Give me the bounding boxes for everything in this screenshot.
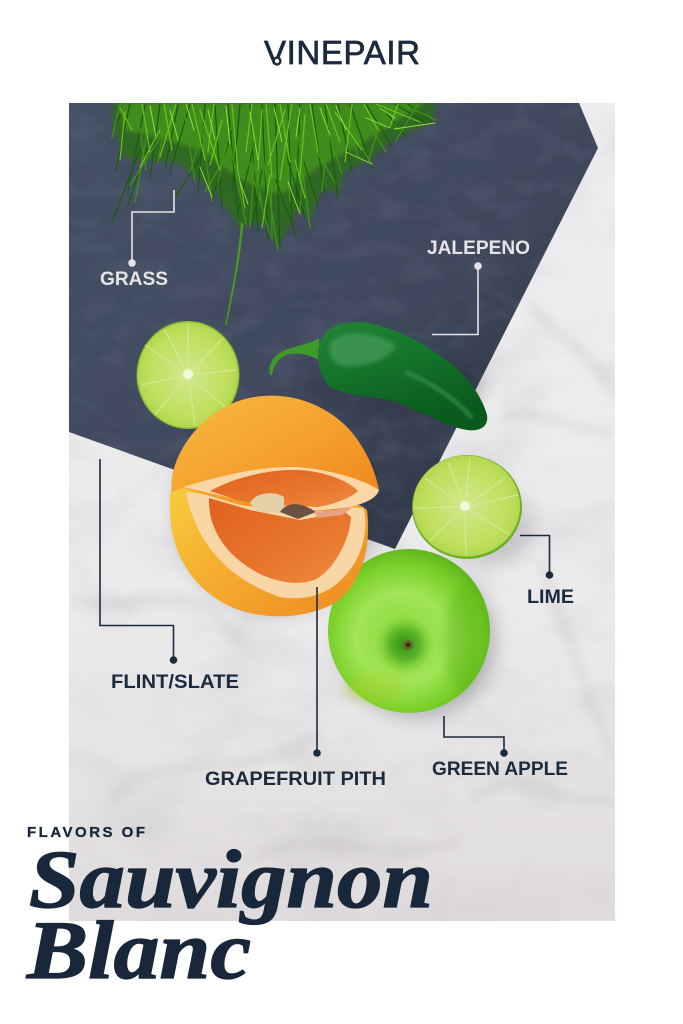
callout: jalepeno: JALEPENO: [427, 238, 530, 259]
callout: grass: [100, 190, 174, 290]
lower half flesh: [209, 498, 351, 583]
shadows under the fruit: [175, 355, 532, 718]
upper half rind: [172, 396, 379, 512]
eyebrow: flavors of: FLAVORS OF: [27, 824, 145, 841]
jalapeno pepper: [269, 322, 487, 430]
title block: [26, 824, 433, 996]
green apple: [328, 549, 490, 713]
callout: flint/slate: FLINT/SLATE: [111, 672, 239, 693]
title: Sauvignon: Sauvignon: [29, 833, 433, 925]
single long blade: [225, 222, 244, 325]
callout: grass: GRASS: [100, 269, 168, 290]
upper half pith: [183, 467, 379, 512]
upper half flesh: [210, 470, 358, 507]
callout: green apple: GREEN APPLE: [432, 759, 568, 780]
callout: grapefruit pith: GRAPEFRUIT PITH: [205, 769, 386, 790]
lower half rind: [170, 482, 368, 616]
callout: flint/slate: [100, 459, 239, 693]
callout: jalepeno: [427, 238, 530, 334]
lower half pith: [186, 492, 365, 598]
callout: green apple: [432, 716, 568, 780]
logo: VinePair: VINEPAIR: [264, 34, 420, 71]
callout: lime: LIME: [527, 587, 574, 608]
callout: grapefruit pith: [205, 587, 386, 790]
left lime: [136, 321, 240, 429]
grapefruit core: [250, 493, 284, 513]
slate board: [69, 103, 599, 550]
photo panel: marble and slate flat lay: [69, 103, 615, 921]
marble background: [69, 103, 615, 921]
grapefruit: [170, 396, 379, 616]
right lime: [412, 455, 522, 559]
callout: lime: [520, 536, 574, 608]
grass: [112, 103, 436, 325]
title: Blanc: Blanc: [26, 904, 251, 996]
